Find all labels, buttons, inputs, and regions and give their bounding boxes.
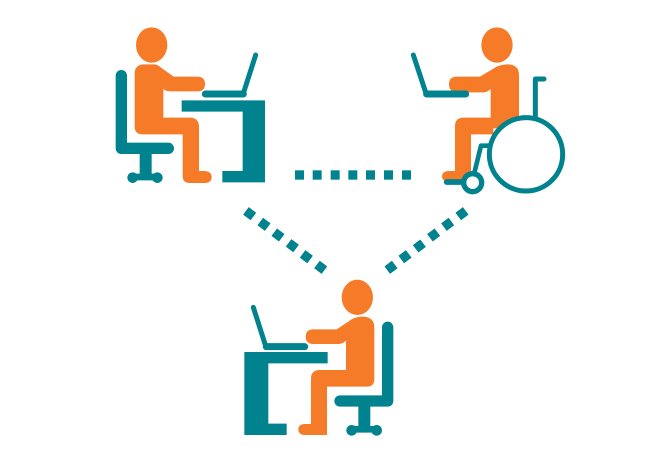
icon: laptop — [205, 55, 256, 94]
connector: horizontal dotted line — [295, 170, 411, 180]
icon: person body — [135, 64, 212, 183]
figure: person at desk, bottom centre — [244, 280, 388, 435]
icon: person body — [298, 317, 374, 435]
figure: person at desk, top left — [121, 27, 265, 183]
icon: person head — [342, 280, 373, 315]
icon: desk — [182, 100, 265, 182]
connector: left diagonal dotted line — [243, 207, 327, 274]
icon: wheelchair — [447, 79, 563, 192]
icon: chair — [121, 76, 168, 180]
connector: right diagonal dotted line — [384, 207, 469, 274]
icon: person body — [442, 64, 519, 182]
icon: chair — [340, 327, 388, 433]
icon: desk — [244, 352, 328, 435]
icon: laptop — [413, 55, 466, 94]
figure: person in wheelchair, top right — [413, 27, 563, 192]
icon: laptop — [253, 307, 305, 347]
icon: person head — [136, 27, 167, 63]
icon: person head — [481, 27, 513, 63]
